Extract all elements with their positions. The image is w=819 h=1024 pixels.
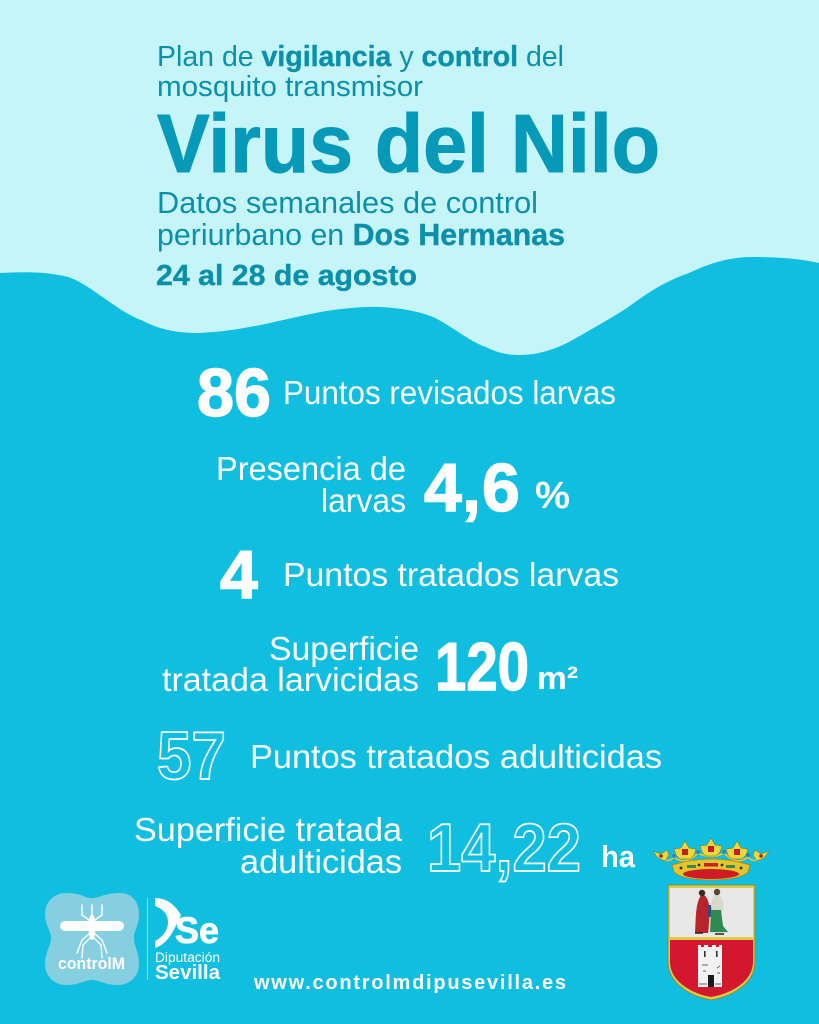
stat: presencia de larvas: % [535,475,570,517]
shield lower field [670,940,753,997]
description: Datos semanales de control [157,186,538,220]
logo: Diputación de Sevilla [155,898,221,984]
stat: puntos tratados larvas [220,537,619,613]
logo: controlM [45,893,139,985]
saints figures [695,889,728,934]
logo caption: Diputación [155,950,220,965]
crown [653,838,769,880]
stat: superficie tratada adulticidas: ha [601,839,636,874]
stat: puntos tratados adulticidas: Puntos tratados adulticidas [250,738,662,775]
background: light header [0,0,819,380]
stat: superficie tratada larvicidas: 120 [435,629,529,705]
stat: puntos revisados larvas: 86 [197,355,271,431]
subtitle: mosquito transmisor [157,71,424,103]
stat: puntos revisados larvas: Puntos revisados larvas [283,374,616,411]
header text block [156,41,660,292]
logo wordmark: controlM [58,955,125,973]
logo badge [45,893,139,985]
coat of arms [653,838,769,1000]
stat: puntos tratados adulticidas [157,718,662,794]
stat: presencia de larvas: larvas [321,482,406,519]
date: 24 al 28 de agosto [156,260,417,292]
stat: superficie tratada adulticidas: 14,22 [427,810,581,886]
stat label: superficie tratada larvicidas: Superficie [269,630,419,667]
website url: www.controlmdipusevilla.es [253,972,566,994]
stat label: superficie tratada larvicidas [162,630,419,698]
title: Virus del Nilo [157,97,660,190]
tower [698,945,722,987]
stat: presencia de larvas: 4,6 [424,450,520,526]
stat: superficie tratada larvicidas: m² [537,660,578,696]
subtitle: Plan de vigilancia y control del [157,41,564,73]
stat: superficie tratada adulticidas: adulticidas [240,843,402,880]
stat: presencia de larvas: Presencia de [216,450,406,487]
description [157,186,565,252]
stat: puntos tratados adulticidas: 57 [157,718,226,794]
stat: superficie tratada adulticidas [134,810,636,886]
logo: Diputación de Sevilla: Se [175,910,219,951]
stat: puntos tratados larvas: Puntos tratados larvas [283,556,619,593]
shield upper field [670,888,753,937]
subtitle [157,41,564,103]
logo mark [155,898,181,948]
stat label: superficie tratada larvicidas: tratada larvicidas [162,661,419,698]
icon: mosquito [60,905,124,958]
description: periurbano en Dos Hermanas [157,218,565,252]
stat: puntos revisados larvas [197,355,616,431]
shield [668,885,755,1000]
statistics list [134,355,662,886]
divider [147,898,148,980]
stat: superficie tratada adulticidas: Superficie tratada [134,811,403,848]
logo: Diputación de Sevilla: Sevilla [155,962,221,984]
background: blue wave panel [0,257,819,1024]
stat: presencia de larvas [216,450,570,526]
stat: puntos tratados larvas: 4 [220,537,258,613]
